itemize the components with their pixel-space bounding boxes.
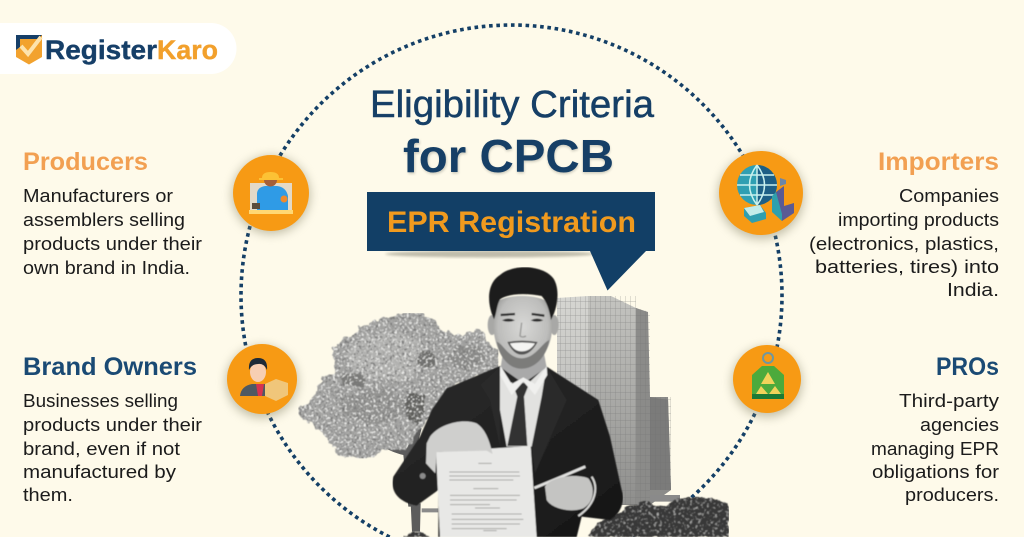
description: products under their [23, 415, 202, 435]
pen [534, 467, 585, 488]
panel: pros [871, 353, 999, 505]
title: for CPCB [404, 132, 614, 184]
head [488, 267, 559, 369]
description: producers. [905, 485, 999, 505]
description: India. [947, 280, 999, 300]
panel: importers [809, 148, 999, 300]
logo pill [0, 23, 237, 74]
face [494, 296, 552, 369]
box [265, 379, 288, 401]
description: obligations for [872, 462, 999, 482]
logo shield icon [16, 35, 42, 64]
description: assemblers selling [23, 210, 185, 230]
brand owners icon [226, 344, 298, 418]
description: own brand in India. [23, 258, 190, 278]
description [23, 186, 202, 278]
panel: producers [23, 148, 202, 278]
tree [298, 313, 498, 532]
description: managing EPR [871, 439, 999, 459]
description [23, 391, 202, 505]
shirt [500, 366, 547, 447]
left hand [426, 421, 493, 473]
icon disc [232, 156, 310, 234]
smile [507, 341, 538, 355]
description [809, 186, 999, 300]
neck [501, 350, 547, 383]
document lines [449, 463, 523, 531]
producers icon [232, 155, 310, 234]
brows and eyes [501, 314, 544, 316]
banner shape [367, 192, 655, 290]
title [370, 84, 655, 184]
description: Third-party [899, 391, 999, 411]
tree foliage [298, 313, 498, 458]
description [871, 391, 999, 505]
heading: Brand Owners [23, 353, 197, 381]
heading: Importers [878, 148, 999, 176]
icon disc [732, 347, 802, 417]
description: agencies [920, 415, 999, 435]
icon disc [718, 153, 804, 239]
description: Manufacturers or [23, 186, 173, 206]
businessman [240, 358, 270, 396]
ears [488, 315, 496, 335]
description: importing products [838, 210, 999, 230]
tie [507, 382, 530, 446]
banner shadow [385, 250, 595, 258]
cufflink [420, 473, 426, 479]
dotted circle [241, 25, 782, 537]
description: Businesses selling [23, 391, 178, 411]
globe [737, 165, 777, 205]
city and cash [744, 178, 794, 223]
description: batteries, tires) into [815, 257, 999, 277]
businessman with document [393, 267, 623, 537]
icon disc [226, 346, 298, 418]
worker [249, 172, 293, 214]
banner text: EPR Registration [387, 206, 636, 239]
recycle tag [752, 353, 784, 399]
logo [0, 23, 237, 74]
description: products under their [23, 234, 202, 254]
description: manufactured by [23, 462, 176, 482]
description: them. [23, 485, 73, 505]
description: Companies [899, 186, 999, 206]
suit [393, 366, 623, 537]
tree trunk [370, 427, 422, 532]
pros icon [732, 345, 802, 417]
bushes [403, 495, 729, 537]
title: for CPCB [403, 130, 614, 182]
heading: Producers [23, 148, 148, 176]
importers icon [718, 151, 804, 239]
logo: Karo [157, 35, 218, 65]
panel: brand owners [23, 353, 202, 505]
lapels [481, 367, 567, 473]
building [557, 296, 671, 510]
speech banner [367, 192, 655, 290]
document [436, 446, 537, 537]
heading: PROs [936, 353, 999, 381]
description: brand, even if not [23, 439, 180, 459]
hair [489, 267, 558, 320]
logo wordmark: Register [45, 35, 158, 65]
right hand [545, 476, 593, 510]
title: Eligibility Criteria [370, 84, 655, 126]
description: (electronics, plastics, [809, 234, 999, 254]
